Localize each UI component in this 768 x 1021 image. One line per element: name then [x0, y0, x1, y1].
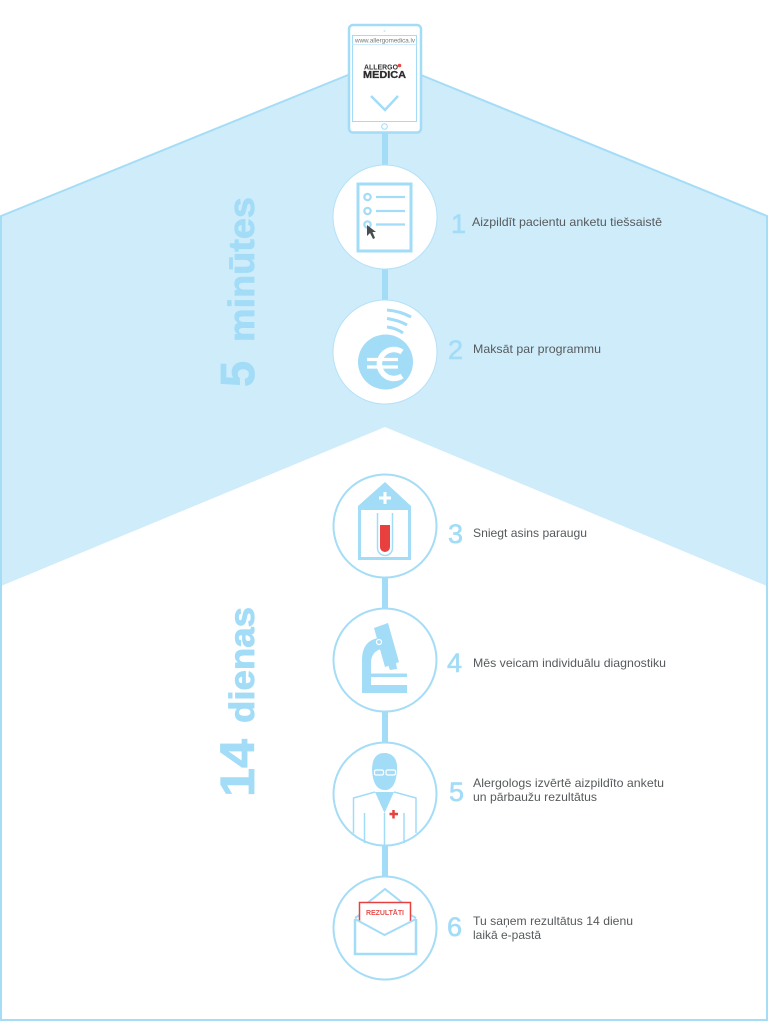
step 3 icon: blood sample in lab	[334, 474, 436, 578]
timeline connectors	[382, 130, 388, 879]
heading: 5 minūtes: 5	[211, 361, 265, 387]
step 4 icon: microscope	[334, 608, 436, 712]
step 1 text: Aizpildīt pacientu anketu tiešsaistē	[472, 215, 662, 229]
step 2 text: Maksāt par programmu	[473, 342, 601, 356]
step 2 icon: euro contactless payment	[333, 300, 437, 404]
icon: tablet with website: MEDICA	[363, 69, 406, 81]
icon: tablet with website: www.allergomedica.lv	[354, 38, 416, 44]
icon: tablet with website: ALLERGO	[364, 64, 399, 72]
step 6 number: 6	[447, 912, 462, 942]
step 6 text: Tu saņem rezultātus 14 dienu	[473, 914, 633, 928]
step 5 text	[473, 776, 664, 804]
step 1 icon: questionnaire	[333, 165, 437, 269]
step 3 text: Sniegt asins paraugu	[473, 526, 587, 540]
icon: tablet with website	[349, 25, 421, 132]
heading: 5 minūtes	[211, 197, 265, 387]
heading: 14 dienas: 14	[211, 739, 265, 797]
step 3 number: 3	[448, 519, 463, 549]
panel: 5 minutes background	[1, 75, 767, 586]
step 2 number: 2	[448, 335, 463, 365]
step 4 text: Mēs veicam individuālu diagnostiku	[473, 656, 666, 670]
step 5 icon: allergologist	[334, 742, 436, 846]
heading: 14 dienas: dienas	[223, 607, 262, 723]
step 6 text: laikā e-pastā	[473, 928, 541, 942]
heading: 14 dienas	[211, 607, 265, 797]
step 6 text	[473, 914, 633, 942]
heading: 5 minūtes: minūtes	[222, 197, 262, 342]
step 4 number: 4	[447, 648, 462, 678]
step 5 text: un pārbaužu rezultātus	[473, 790, 597, 804]
step 5 text: Alergologs izvērtē aizpildīto anketu	[473, 776, 664, 790]
step 1 number: 1	[451, 209, 466, 239]
step 6 icon: results envelope: REZULTĀTI	[366, 909, 404, 917]
step 6 icon: results envelope	[334, 876, 436, 980]
step 5 number: 5	[449, 777, 464, 807]
